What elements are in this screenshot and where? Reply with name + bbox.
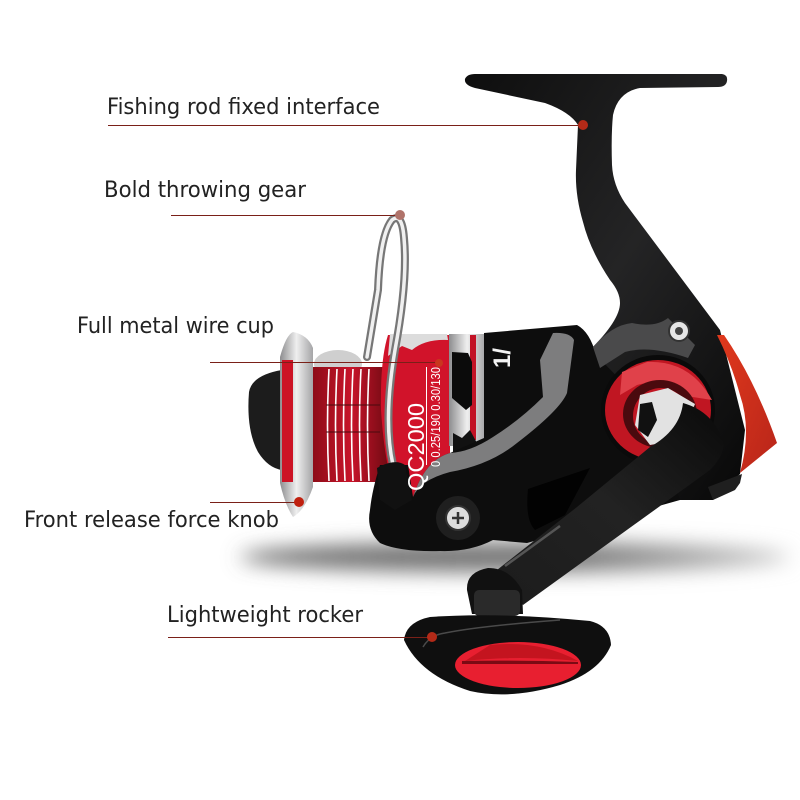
icon: red spool with grooves: [312, 367, 390, 482]
icon: red knob inlay: [455, 642, 581, 688]
icon: bail wire: [367, 218, 405, 465]
icon: bail arm base: [377, 462, 412, 510]
icon: stem screw: [669, 321, 689, 341]
icon: rotor red ring: [601, 355, 715, 465]
icon: inlay groove: [462, 661, 578, 664]
callout: metal wire cup: [77, 314, 443, 367]
icon: crank arm: [497, 403, 724, 605]
icon: line roller ball: [314, 350, 362, 378]
icon: window slot: [452, 352, 472, 410]
model text: QC2000: [403, 403, 429, 491]
icon: rear foot: [708, 474, 742, 500]
icon: spool flange: [280, 332, 313, 517]
callout: lightweight rocker: [167, 603, 437, 642]
icon: red band stripe: [470, 335, 476, 440]
icon: arm highlight: [505, 526, 560, 566]
callout: front release knob: [24, 497, 304, 533]
callout: bold throwing gear: Bold throwing gear: [104, 178, 307, 203]
callout: front release knob: Front release force knob: [24, 508, 279, 533]
white label line: [426, 367, 428, 465]
ground shadow: [240, 542, 790, 572]
icon: silver band: [449, 334, 485, 446]
icon: knob highlight: [423, 620, 560, 647]
icon: grey body sweep: [413, 333, 574, 497]
icon: body window openings: [527, 468, 590, 530]
icon: arm joint: [467, 568, 523, 614]
callout: fishing rod interface: [107, 95, 588, 130]
icon: grey stem joint: [593, 318, 695, 368]
callout: lightweight rocker: Lightweight rocker: [167, 603, 364, 628]
icon: reel body: [369, 325, 680, 551]
icon: flange red stripe: [282, 360, 293, 482]
model mark: 1/: [489, 348, 516, 368]
icon: inlay upper facet: [465, 644, 578, 661]
icon: ring silver patch: [388, 334, 448, 356]
icon: side screw: [436, 496, 480, 540]
icon: handle knob: [404, 615, 611, 694]
callout: fishing rod interface: Fishing rod fixed interface: [107, 95, 380, 120]
spec text: 0 0.25/190 0.30/130: [428, 367, 443, 467]
reel illustration: [248, 74, 777, 694]
callout: metal wire cup: Full metal wire cup: [77, 314, 274, 339]
icon: joint neck: [474, 590, 520, 616]
icon: black zigzag notch: [453, 430, 478, 452]
callout: bold throwing gear: [104, 178, 405, 220]
icon: handle hex nut: [635, 388, 695, 445]
icon: red guard ring: [381, 335, 450, 497]
icon: reel stem and foot: [465, 74, 745, 500]
icon: red rear plate: [717, 335, 777, 473]
icon: front spool cap: [248, 370, 282, 470]
